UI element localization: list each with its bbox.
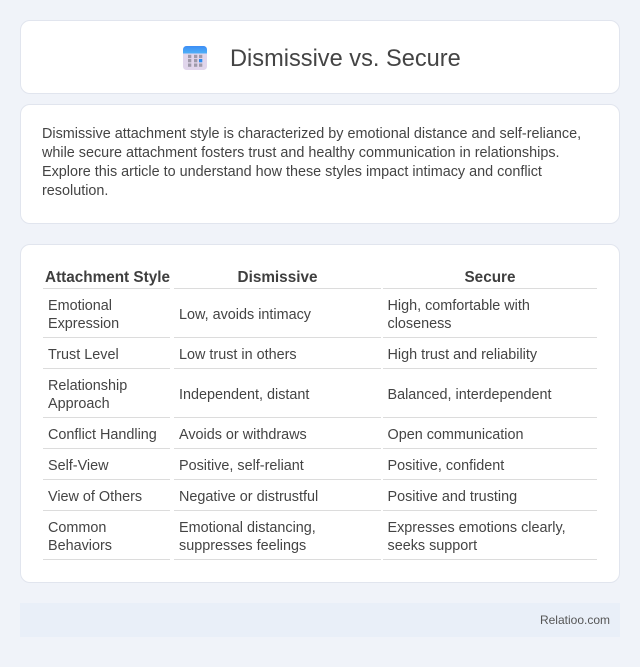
text block: introduction: while secure attachment fosters trust and healthy communication in relationships. — [42, 145, 560, 161]
row: self-view: Positive, self-reliant — [179, 458, 304, 474]
row: relationship approach: Relationship — [48, 378, 127, 394]
row: relationship approach — [48, 378, 552, 412]
row: view of others: View of Others — [48, 489, 142, 505]
row: relationship approach: Approach — [48, 396, 110, 412]
row: common behaviors — [48, 520, 566, 554]
row: view of others: Positive and trusting — [388, 489, 517, 505]
row: self-view: Positive, confident — [388, 458, 504, 474]
row: conflict handling — [48, 427, 523, 443]
row: conflict handling: Avoids or withdraws — [179, 427, 307, 443]
row: common behaviors: seeks support — [388, 538, 477, 554]
row: trust level — [48, 347, 537, 363]
panel: introduction — [20, 104, 620, 224]
text block: introduction — [42, 126, 581, 199]
row: common behaviors: suppresses feelings — [179, 538, 306, 554]
row: emotional expression: Low, avoids intimacy — [179, 307, 311, 323]
row: trust level: Low trust in others — [179, 347, 297, 363]
row: emotional expression — [48, 298, 530, 332]
row: emotional expression: Emotional — [48, 298, 112, 314]
row: common behaviors: Expresses emotions clearly, — [388, 520, 566, 536]
row: conflict handling: Open communication — [388, 427, 523, 443]
table: comparison — [43, 269, 597, 560]
row: trust level: High trust and reliability — [388, 347, 537, 363]
row: emotional expression: closeness — [388, 316, 452, 332]
row: self-view — [48, 458, 504, 474]
text block: introduction: Dismissive attachment style is characterized by emotional distance and self-reliance, — [42, 126, 581, 142]
table heading: secure: Secure — [464, 269, 516, 286]
title: Dismissive vs. Secure — [230, 46, 461, 72]
row: common behaviors: Emotional distancing, — [179, 520, 316, 536]
text block: introduction: Explore this article to understand how these styles impact intimacy and conflict — [42, 164, 542, 180]
row: self-view: Self-View — [48, 458, 109, 474]
panel: comparison table — [20, 244, 620, 583]
row: common behaviors: Common — [48, 520, 106, 536]
footer text: brand: Relatioo.com — [540, 613, 610, 627]
row: relationship approach: Balanced, interdependent — [388, 387, 552, 403]
panel: header — [20, 20, 620, 94]
row: common behaviors: Behaviors — [48, 538, 112, 554]
row: trust level: Trust Level — [48, 347, 119, 363]
row: emotional expression: High, comfortable with — [388, 298, 530, 314]
row: relationship approach: Independent, distant — [179, 387, 309, 403]
table heading: dismissive: Dismissive — [238, 269, 317, 286]
footer — [20, 603, 620, 637]
text block: introduction: resolution. — [42, 183, 108, 199]
row: emotional expression: Expression — [48, 316, 119, 332]
row: view of others — [48, 489, 517, 505]
icon: calendar — [183, 46, 207, 70]
row: conflict handling: Conflict Handling — [48, 427, 157, 443]
table heading: attachment style: Attachment Style — [45, 269, 170, 286]
row: view of others: Negative or distrustful — [179, 489, 318, 505]
